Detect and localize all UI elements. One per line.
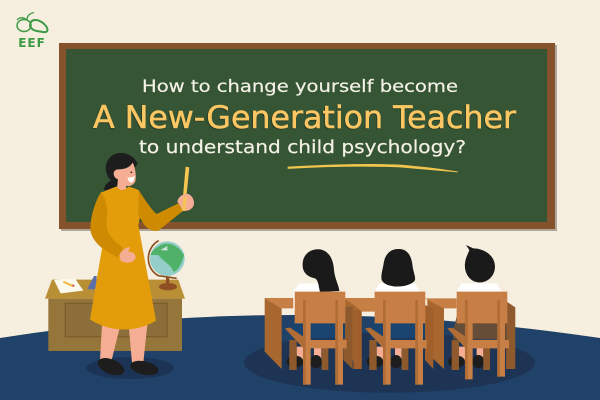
teacher [86, 153, 194, 379]
desks [265, 298, 515, 369]
teacher's desk [45, 276, 185, 351]
student 2 [367, 249, 425, 368]
teacher's left arm [138, 190, 183, 231]
face [114, 163, 136, 192]
globe [148, 241, 185, 290]
pointer [182, 167, 189, 211]
students and desks [244, 245, 535, 393]
student 1 [287, 249, 345, 368]
logo: EEF: EEF [18, 36, 46, 50]
hands [119, 247, 136, 263]
chalk underline [288, 164, 458, 172]
title line 3: to understand child psychology? [139, 137, 466, 158]
title line 1: How to change yourself become [142, 77, 458, 97]
chair 2 [365, 292, 427, 385]
floor [0, 315, 600, 400]
dress [90, 187, 156, 329]
chalkboard [59, 43, 557, 231]
teacher's right arm [90, 193, 123, 257]
chair 1 [285, 292, 347, 385]
chair 3 [447, 292, 509, 379]
hair [104, 153, 138, 190]
logo: EEF [17, 12, 48, 50]
paper with pencil [54, 278, 83, 293]
book [87, 276, 97, 290]
title line 2: A New-Generation Teacher [93, 100, 516, 136]
student 3 [448, 245, 507, 368]
